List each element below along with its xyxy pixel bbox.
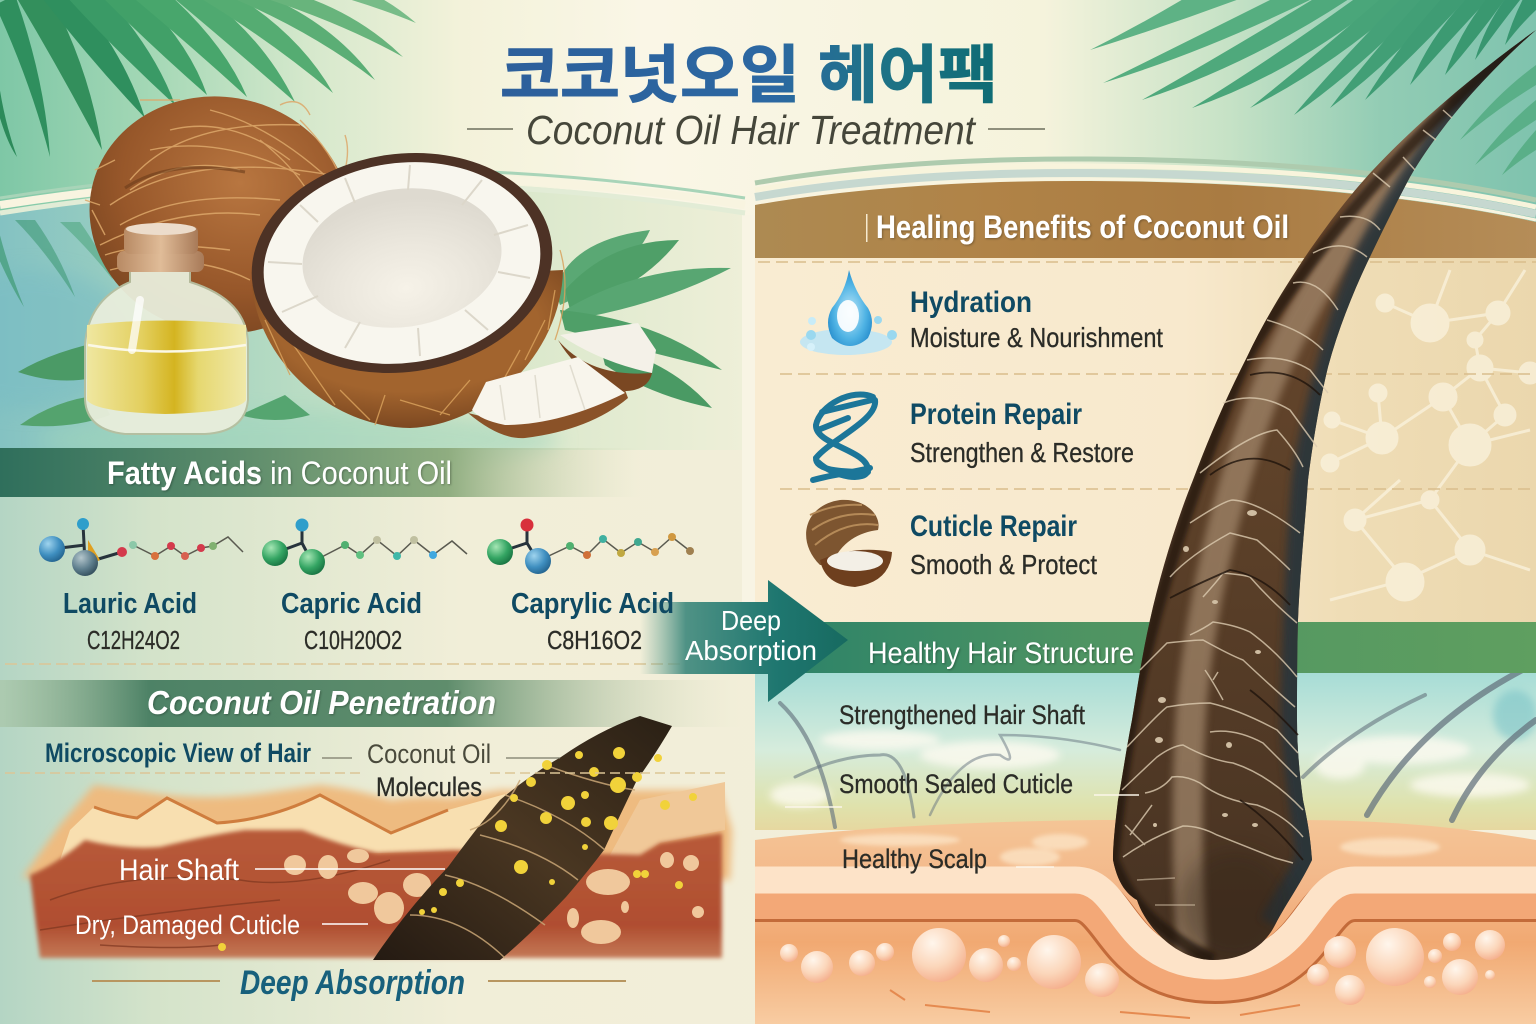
molecule: capric acid <box>262 518 467 575</box>
acid names and formulas: C10H20O2 <box>304 625 402 655</box>
hair shaft <box>373 716 672 960</box>
fatty acids band: Fatty Acids in Coconut Oil <box>107 455 452 491</box>
acid names and formulas <box>63 588 674 655</box>
scene labels: Healthy Scalp <box>842 844 987 874</box>
acid names and formulas: Capric Acid <box>281 588 422 620</box>
fat cells <box>284 849 704 944</box>
hair shading <box>1113 30 1536 960</box>
pale hair spots <box>1153 510 1261 827</box>
text: protein repair: Strengthen & Restore <box>910 437 1134 468</box>
acid names and formulas: C8H16O2 <box>547 625 642 655</box>
meat segments <box>268 165 530 356</box>
dark scale creases <box>1170 372 1320 860</box>
curved cream divider bands <box>0 169 745 213</box>
dashed line under acids <box>5 663 700 665</box>
leaves behind coconut <box>18 230 731 426</box>
text: cuticle repair: Smooth & Protect <box>910 549 1097 580</box>
acid names and formulas: Lauric Acid <box>63 588 197 620</box>
acid names and formulas: Caprylic Acid <box>511 588 674 620</box>
molecule: caprylic acid <box>487 518 694 574</box>
scene labels: Strengthened Hair Shaft <box>839 700 1085 730</box>
clouds <box>770 730 1530 807</box>
scene labels: Smooth Sealed Cuticle <box>839 769 1073 799</box>
panel header band <box>755 181 1536 258</box>
oil cells <box>780 928 1505 1005</box>
palm leaves top left <box>0 0 416 307</box>
dashed line under labels <box>5 772 725 774</box>
text: protein repair <box>910 398 1134 468</box>
curved band above header <box>755 159 1536 220</box>
tissue top layer <box>22 785 732 880</box>
large hair strand <box>1113 30 1536 960</box>
acid names and formulas: C12H24O2 <box>87 625 180 655</box>
text: hydration: Hydration <box>910 286 1032 319</box>
healthy hair structure banner <box>800 622 1536 673</box>
title <box>467 41 1045 153</box>
icon: coconut shell <box>806 500 892 587</box>
icon: dna helix <box>813 395 875 480</box>
cuticle scale lines <box>1122 110 1452 905</box>
whole coconut <box>67 72 373 358</box>
oil molecules <box>218 747 697 951</box>
microscopic view labels <box>45 738 560 802</box>
shell fibres <box>265 250 565 425</box>
text: protein repair: Protein Repair <box>910 398 1082 431</box>
scene labels <box>785 700 1139 874</box>
text: hydration: Moisture & Nourishment <box>910 322 1163 353</box>
coconut oil penetration band <box>0 680 745 727</box>
microscopic view labels: Coconut Oil <box>367 739 491 769</box>
coconut chunks <box>468 323 656 438</box>
coconut oil penetration band: Coconut Oil Penetration <box>147 684 496 721</box>
damaged cuticle label: Dry, Damaged Cuticle <box>75 910 300 940</box>
halved coconut <box>237 134 567 428</box>
heading: healing benefits: Healing Benefits of Coconut Oil <box>876 209 1289 245</box>
tan tissue at right <box>610 782 725 868</box>
healthy hair structure banner: Healthy Hair Structure <box>868 637 1134 670</box>
tissue red layer <box>30 830 722 958</box>
right panel parchment <box>755 159 1536 625</box>
cuticle lines <box>410 765 635 958</box>
arrow: deep absorption: Absorption <box>685 635 817 666</box>
scene: healthy hair scalp <box>755 663 1536 1024</box>
skin layers around follicle <box>755 880 1536 978</box>
scalp surface folds <box>840 834 1440 866</box>
icon: water drop <box>800 270 897 355</box>
arrow: deep absorption <box>640 580 848 702</box>
lower skin flecks <box>890 990 1300 1018</box>
oil bottle <box>85 223 248 434</box>
microscopic view labels: Microscopic View of Hair <box>45 738 311 768</box>
scalp skin <box>755 820 1536 1024</box>
subtitle: Coconut Oil Hair Treatment <box>526 107 976 153</box>
section divider lines <box>758 262 1536 489</box>
arrow: deep absorption: Deep <box>721 605 781 636</box>
text: cuticle repair: Cuticle Repair <box>910 510 1077 543</box>
palm leaves top right <box>1090 0 1536 175</box>
sky backdrop <box>755 670 1536 830</box>
hair shaft label: Hair Shaft <box>119 854 240 887</box>
pale tissue band <box>60 790 520 860</box>
tissue cracks <box>40 860 390 948</box>
microscopic view labels: Molecules <box>376 772 482 802</box>
microscopic cross-section <box>22 716 732 960</box>
faint molecular network <box>1322 270 1536 600</box>
molecule: lauric acid <box>39 518 243 576</box>
fatty acids band <box>0 448 640 497</box>
background hair strands <box>780 663 1536 827</box>
text: cuticle repair <box>910 510 1097 580</box>
text: hydration <box>910 286 1163 353</box>
title: 코코넛오일 헤어팩 <box>500 41 998 111</box>
deep absorption caption: Deep Absorption <box>240 964 465 1002</box>
